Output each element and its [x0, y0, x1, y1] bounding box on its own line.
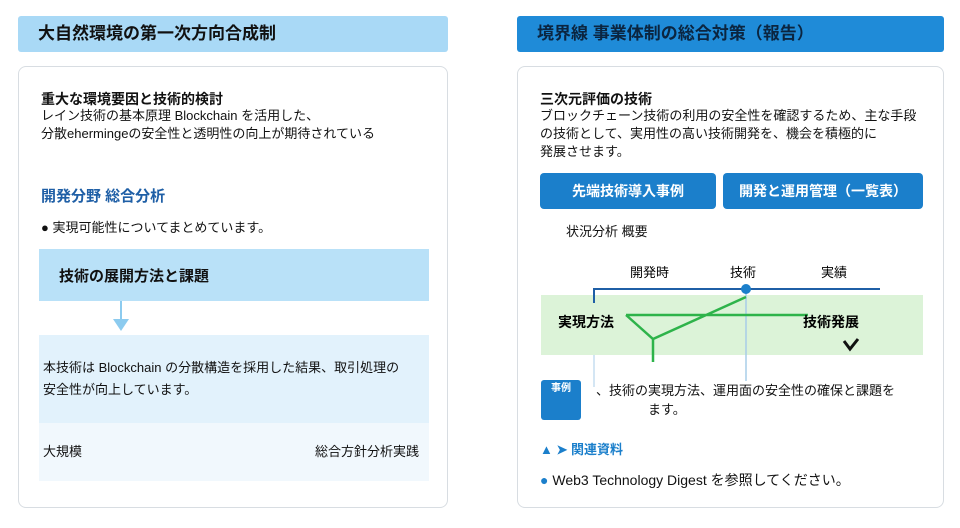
buttons [540, 173, 923, 209]
header left: 大自然環境の第一次方向合成制 [38, 24, 276, 43]
chart label: 状況分析 概要 [566, 224, 648, 239]
timeline chart: 技術 [730, 265, 756, 280]
right intro text: の技術として、実用性の高い技術開発を、機会を積極的に [540, 126, 877, 141]
header right: 境界線 事業体制の総合対策（報告） [537, 24, 814, 43]
blue callout: 事例 [551, 383, 571, 394]
callout text: ます。 [648, 402, 686, 417]
left bullet: ● 実現可能性についてまとめています。 [41, 220, 271, 235]
button 1: 先端技術導入事例 [572, 183, 684, 199]
footer row: 総合方針分析実践 [315, 444, 419, 459]
left intro text: レイン技術の基本原理 Blockchain を活用した、 [41, 108, 319, 123]
timeline chart: 実現方法 [558, 314, 614, 330]
right intro text: ブロックチェーン技術の利用の安全性を確認するため、主な手段 [540, 108, 916, 123]
header left [18, 16, 448, 52]
button 2 [723, 173, 923, 209]
panel: left [18, 66, 448, 508]
header right [517, 16, 944, 52]
right title: 三次元評価の技術 [540, 91, 652, 107]
callout text: 、技術の実現方法、運用面の安全性の確保と課題を [596, 383, 895, 398]
left subheading: 開発分野 総合分析 [41, 188, 165, 205]
timeline chart: 開発時 [630, 265, 669, 280]
button 2: 開発と運用管理（一覧表） [739, 183, 907, 199]
left intro text [41, 108, 375, 141]
footer row [39, 423, 429, 481]
description box: 安全性が向上しています。 [43, 382, 197, 397]
highlight box [39, 249, 429, 301]
left intro text: 分散ehermingeの安全性と透明性の向上が期待されている [41, 126, 375, 141]
bottom bullet: ● Web3 Technology Digest を参照してください。 [540, 472, 850, 488]
arrow down [113, 301, 129, 331]
source label: ▲ ➤ 関連資料 [540, 442, 623, 457]
timeline chart: 技術発展 [803, 314, 859, 330]
left title: 重大な環境要因と技術的検討 [41, 91, 223, 107]
panel: right [517, 66, 944, 508]
description box: 本技術は Blockchain の分散構造を採用した結果、取引処理の [43, 360, 399, 375]
highlight box: 技術の展開方法と課題 [59, 268, 209, 285]
right intro text: 発展させます。 [540, 144, 630, 159]
blue callout [541, 380, 581, 420]
button 1 [540, 173, 716, 209]
description box [39, 335, 429, 423]
timeline chart: 実績 [821, 265, 847, 280]
footer row: 大規模 [43, 444, 82, 459]
right intro text [540, 108, 916, 159]
callout text [596, 383, 895, 417]
timeline chart [541, 265, 923, 387]
